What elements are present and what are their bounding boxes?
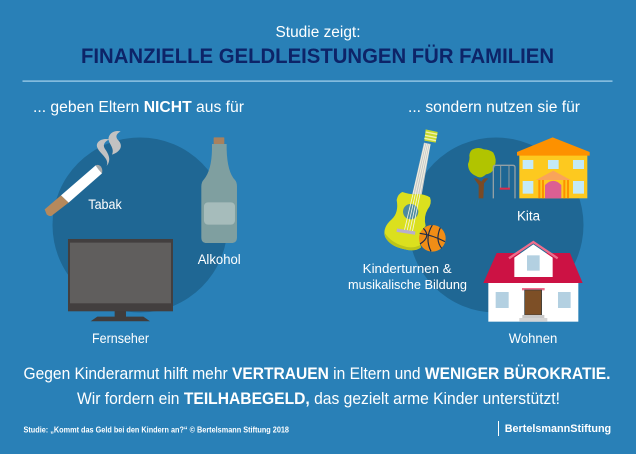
icon: guitar bbox=[384, 129, 446, 252]
icon: television bbox=[68, 239, 173, 321]
label: Alkohol: Alkohol bbox=[198, 252, 241, 267]
source note: Studie: „Kommt das Geld bei den Kindern an?“ © Bertelsmann Stiftung 2018 bbox=[24, 426, 289, 434]
title: FINANZIELLE GELDLEISTUNGEN FÜR FAMILIEN bbox=[81, 43, 554, 68]
icon: bottle bbox=[201, 137, 237, 243]
label: Wohnen: Wohnen bbox=[509, 331, 557, 346]
label: Kinderturnen und musikalische Bildung bbox=[348, 261, 467, 292]
right circle bbox=[408, 138, 584, 312]
icon: kindergarten with tree and swing bbox=[468, 137, 590, 198]
conclusion text: Gegen Kinderarmut hilft mehr VERTRAUEN in Eltern und WENIGER BÜROKRATIE. bbox=[24, 364, 610, 383]
left heading: ... geben Eltern NICHT aus für bbox=[33, 99, 244, 116]
label: Tabak: Tabak bbox=[88, 197, 122, 212]
icon: basketball bbox=[419, 225, 446, 252]
left circle bbox=[52, 138, 228, 312]
logo: Bertelsmann Stiftung: BertelsmannStiftung bbox=[505, 423, 611, 435]
conclusion text bbox=[24, 364, 610, 408]
label: Kinderturnen und musikalische Bildung: musikalische Bildung bbox=[348, 277, 467, 292]
panel: not spent on bbox=[45, 131, 241, 346]
label: Fernseher: Fernseher bbox=[92, 331, 149, 346]
label: Kita: Kita bbox=[517, 209, 540, 224]
icon: cigarette bbox=[45, 131, 121, 216]
panel: spent on bbox=[348, 129, 590, 346]
label: Kinderturnen und musikalische Bildung: Kinderturnen & bbox=[363, 261, 452, 276]
intro heading: Studie zeigt: bbox=[276, 24, 360, 41]
conclusion text: Wir fordern ein TEILHABEGELD, das gezielt arme Kinder unterstützt! bbox=[77, 390, 560, 408]
icon: house bbox=[483, 242, 583, 322]
right heading: ... sondern nutzen sie für bbox=[408, 99, 580, 116]
